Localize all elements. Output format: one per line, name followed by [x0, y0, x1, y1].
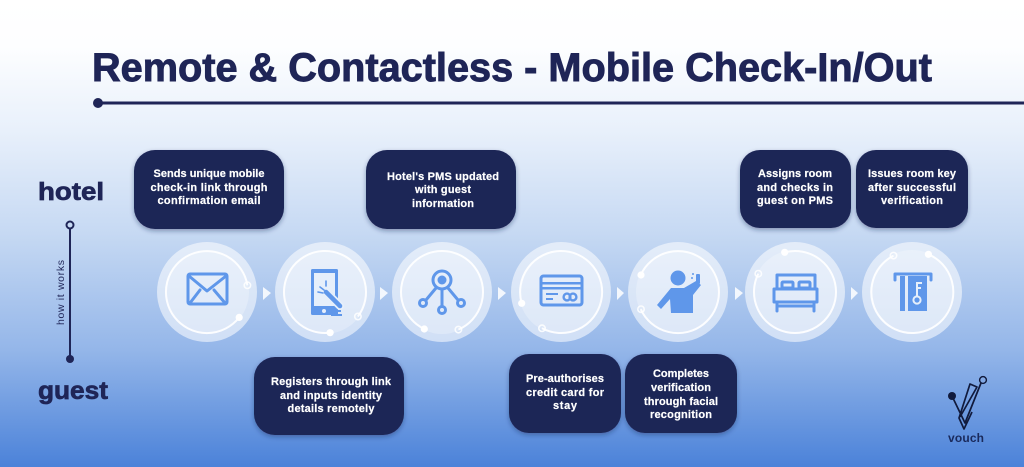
callout: PMS updated: Hotel's PMS updated — [387, 171, 499, 183]
callout: sends link: check-in link through — [150, 182, 268, 194]
step 6: bed — [745, 242, 845, 342]
step 3: network hub — [392, 242, 492, 342]
callout: pre-authorises — [509, 354, 621, 433]
step circles — [157, 242, 962, 342]
callout: facial recognition — [625, 354, 737, 433]
title: Remote & Contactless - Mobile Check-In/Out — [92, 46, 932, 90]
callout: registers — [254, 357, 404, 435]
callout: pre-authorises: stay — [553, 400, 578, 412]
how it works axis — [55, 222, 74, 363]
callout: registers: and inputs identity — [280, 390, 383, 402]
step 5: selfie person — [628, 242, 728, 342]
logo: vouch — [948, 377, 986, 445]
step 1: email — [157, 242, 257, 342]
callout: facial recognition: Completes — [653, 368, 709, 380]
callout: PMS updated: information — [412, 198, 474, 210]
callout: facial recognition: through facial — [644, 396, 718, 408]
callout: assigns room: and checks in — [757, 182, 833, 194]
callout: sends link: Sends unique mobile — [154, 168, 264, 180]
callout: assigns room: Assigns room — [758, 168, 832, 180]
callout: registers: Registers through link — [271, 376, 392, 388]
callout: sends link — [134, 150, 284, 229]
callout: assigns room — [740, 150, 851, 228]
callout: issues room key: after successful — [868, 182, 956, 194]
arrow 1 — [263, 287, 271, 300]
callout: registers: details remotely — [288, 403, 375, 415]
step 7: key card — [862, 242, 962, 342]
callout: PMS updated: with guest — [414, 184, 471, 196]
arrow 5 — [735, 287, 743, 300]
logo: vouch: vouch — [948, 431, 984, 445]
arrow 2 — [380, 287, 388, 300]
callout: issues room key: Issues room key — [868, 168, 957, 180]
callout: pre-authorises: credit card for — [526, 387, 605, 399]
callout: sends link: confirmation email — [158, 195, 260, 207]
callout: assigns room: guest on PMS — [757, 195, 833, 207]
step 4: credit card — [511, 242, 611, 342]
callout: issues room key: verification — [881, 195, 943, 207]
callout: issues room key — [856, 150, 968, 228]
callout: facial recognition: verification — [651, 382, 711, 394]
title underline — [93, 98, 1024, 108]
label: guest: guest — [38, 377, 109, 405]
arrow 3 — [498, 287, 506, 300]
step 2: phone — [275, 242, 375, 342]
arrow 6 — [851, 287, 858, 300]
arrow 4 — [617, 287, 624, 300]
callout: PMS updated — [366, 150, 516, 229]
label: hotel: hotel — [38, 178, 104, 206]
callout: pre-authorises: Pre-authorises — [526, 373, 604, 385]
how it works axis: how it works — [55, 260, 67, 325]
callout: facial recognition: recognition — [650, 409, 712, 421]
